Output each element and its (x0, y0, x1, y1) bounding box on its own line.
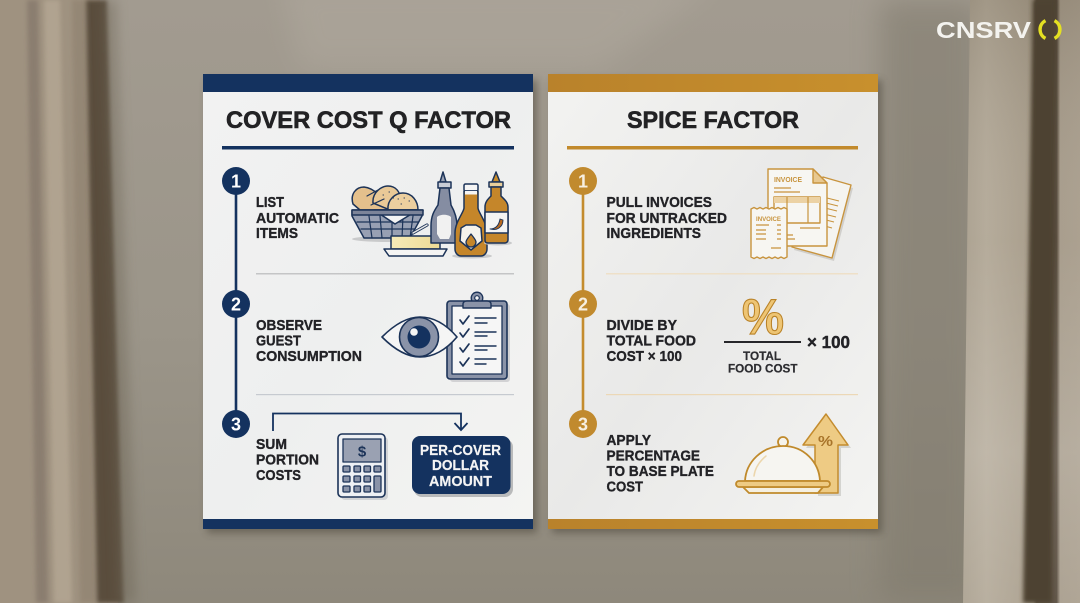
text: observe guest consumption: GUEST (256, 332, 301, 350)
icon: hot sauce bottle (484, 172, 512, 246)
text: observe guest consumption (256, 317, 362, 365)
icon: calculator: $ (358, 444, 367, 460)
step timeline: numbered markers: 1 (231, 172, 241, 192)
text: divide by total food cost x 100: DIVIDE BY (606, 317, 677, 334)
icon: grey sauce bottle (431, 172, 457, 243)
icon: calculator (338, 434, 388, 500)
icon: bread basket and butter (352, 186, 447, 256)
text: apply percentage to base plate cost (606, 432, 714, 496)
text: list automatic items: AUTOMATIC (256, 210, 339, 227)
callout: per-cover dollar amount: DOLLAR (432, 458, 489, 474)
callout: per-cover dollar amount (412, 436, 513, 497)
step timeline: numbered markers: 3 (578, 414, 588, 434)
text: divide by total food cost x 100 (606, 317, 696, 365)
icon: up arrow with percent: % (818, 433, 833, 450)
text: pull invoices for untracked ingredients (606, 194, 727, 242)
icon: ketchup bottle (452, 184, 492, 258)
callout: per-cover dollar amount: PER-COVER (420, 443, 501, 459)
text: sum portion costs (256, 436, 319, 484)
text: list automatic items: LIST (256, 194, 284, 211)
formula: percent over total food cost times 100: TOTAL (743, 351, 781, 363)
step timeline: numbered markers (569, 167, 597, 438)
icon: invoices (751, 169, 853, 261)
text: list automatic items: ITEMS (256, 225, 298, 242)
panel: cover cost Q factor (203, 74, 537, 533)
icon: invoices: INVOICE (756, 216, 781, 223)
icon: up arrow with percent (803, 414, 851, 496)
formula: percent over total food cost times 100: % (742, 289, 784, 345)
text: sum portion costs: PORTION (256, 452, 319, 468)
icon: invoices: INVOICE (774, 177, 802, 184)
text: sum portion costs: COSTS (256, 467, 301, 484)
heading: spice factor: SPICE FACTOR (627, 107, 799, 134)
step timeline: numbered markers: 2 (578, 294, 588, 314)
text: sum portion costs: SUM (256, 436, 287, 453)
text: pull invoices for untracked ingredients: INGREDIENTS (606, 225, 701, 242)
icon: clipboard checklist (447, 292, 510, 382)
text: apply percentage to base plate cost: TO BASE PLATE (606, 463, 714, 480)
arrow: connector to per-cover amount (273, 414, 468, 431)
formula: percent over total food cost times 100: FOOD COST (728, 364, 798, 376)
step timeline: numbered markers: 2 (231, 294, 241, 314)
icon: serving cloche (736, 437, 830, 493)
logo: CNSRV (936, 17, 1060, 43)
step timeline: numbered markers: 1 (578, 172, 588, 192)
text: divide by total food cost x 100: COST × 100 (606, 348, 682, 365)
text: divide by total food cost x 100: TOTAL FOOD (606, 332, 696, 350)
heading: cover cost q factor: COVER COST Q FACTOR (226, 107, 511, 134)
text: observe guest consumption: OBSERVE (256, 317, 322, 334)
step timeline: numbered markers (222, 167, 250, 438)
text: apply percentage to base plate cost: COST (606, 478, 643, 496)
icon: eye (382, 317, 457, 357)
text: list automatic items (256, 194, 339, 242)
text: apply percentage to base plate cost: APPLY (606, 432, 651, 449)
text: observe guest consumption: CONSUMPTION (256, 348, 362, 365)
callout: per-cover dollar amount: AMOUNT (429, 474, 492, 490)
text: pull invoices for untracked ingredients: FOR UNTRACKED (606, 210, 727, 227)
panel: spice factor (548, 74, 882, 533)
formula: percent over total food cost times 100 (724, 289, 850, 376)
logo: CNSRV: CNSRV (936, 17, 1031, 43)
step timeline: numbered markers: 3 (231, 414, 241, 434)
formula: percent over total food cost times 100: × 100 (807, 332, 850, 352)
text: apply percentage to base plate cost: PERCENTAGE (606, 448, 700, 464)
text: pull invoices for untracked ingredients: PULL INVOICES (606, 194, 712, 211)
